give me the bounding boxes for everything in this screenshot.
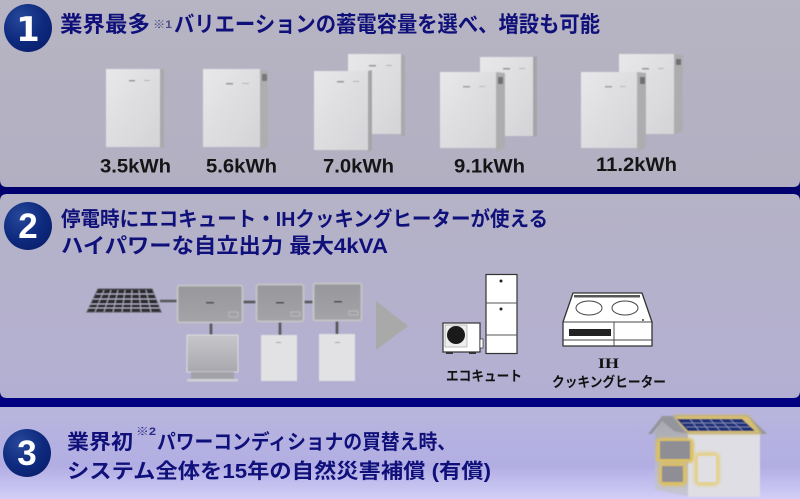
- product: 9.1kWh two batteries: [440, 56, 537, 152]
- badge: number 1: [4, 4, 52, 52]
- heading: section 3: ※2: [136, 426, 156, 438]
- label: 11.2kWh: 11.2kWh: [596, 154, 677, 176]
- panel: section 2 high power backup: [4, 202, 666, 390]
- label: EcoCute: エコキュート: [446, 368, 522, 384]
- label: IH cooking heater: [552, 356, 666, 390]
- icon: IH cooktop: [563, 293, 652, 346]
- heading: section 3: パワーコンディショナの買替え時、: [157, 430, 456, 454]
- heading: section 1: バリエーションの蓄電容量を選べ、増設も可能: [174, 12, 600, 37]
- label: 3.5kWh: 3.5kWh: [100, 156, 171, 178]
- panel: section 3 disaster compensation: [3, 415, 767, 497]
- icon: house with solar panels and batteries: [648, 415, 767, 497]
- unit: power conditioner 3: [314, 284, 362, 320]
- label: IH cooking heater: IH: [598, 356, 619, 372]
- label: 7.0kWh: 7.0kWh: [323, 156, 394, 178]
- label: 5.6kWh: 5.6kWh: [206, 156, 277, 178]
- badge: number 3: 3: [17, 434, 37, 473]
- product: 3.5kWh battery: [106, 69, 164, 148]
- product: 7.0kWh two batteries: [314, 54, 405, 152]
- unit: silver storage battery: [187, 335, 238, 382]
- heading: section 1: ※1: [153, 19, 172, 31]
- unit: power conditioner 2: [256, 284, 304, 322]
- badge: number 1: 1: [16, 10, 40, 50]
- product: 5.6kWh battery: [203, 69, 268, 150]
- icon: EcoCute heat pump and tank: [443, 274, 517, 354]
- icon: solar panel: [87, 289, 161, 312]
- badge: number 3: [3, 429, 51, 477]
- product: 11.2kWh two batteries: [581, 54, 683, 152]
- heading: section 3: [67, 426, 491, 483]
- heading: section 2: ハイパワーな自立出力 最大4kVA: [61, 235, 388, 258]
- label: 9.1kWh: 9.1kWh: [454, 156, 525, 178]
- label: IH cooking heater: クッキングヒーター: [552, 374, 666, 390]
- arrow: [376, 301, 408, 350]
- unit: white storage battery B: [319, 334, 355, 381]
- heading: section 3: システム全体を15年の自然災害補償 (有償): [67, 459, 491, 483]
- panel: section 1 storage capacities: [4, 4, 683, 178]
- badge: number 2: [4, 202, 52, 250]
- heading: section 2: 停電時にエコキュート・IHクッキングヒーターが使える: [61, 207, 548, 231]
- badge: number 2: 2: [18, 207, 38, 246]
- unit: power conditioner 1: [178, 286, 242, 322]
- heading: section 2: [61, 207, 548, 258]
- heading: section 3: 業界初: [67, 431, 133, 454]
- unit: white storage battery A: [261, 335, 297, 381]
- heading: section 1: 業界最多: [60, 12, 150, 37]
- wiring between units: [160, 301, 337, 335]
